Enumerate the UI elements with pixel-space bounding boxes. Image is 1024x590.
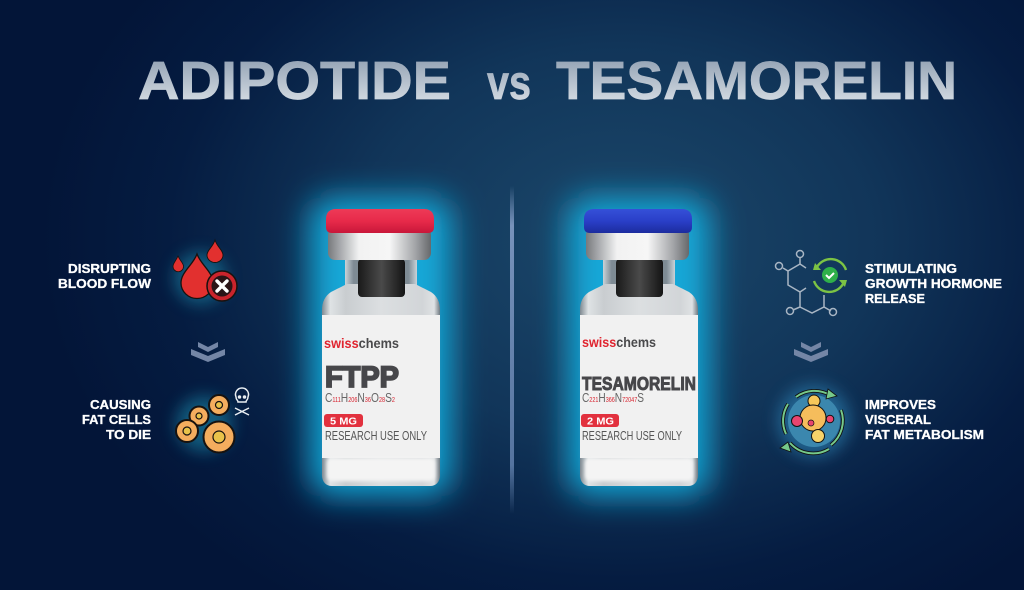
vial neck (345, 258, 417, 290)
label: disrupting blood flow: DISRUPTING (68, 262, 151, 276)
research note: RESEARCH USE ONLY (582, 428, 682, 443)
label: stimulating growth hormone release: GROWTH HORMONE (865, 277, 1002, 291)
label: stimulating growth hormone release: STIMULATING (865, 262, 957, 276)
label: improves visceral fat metabolism: IMPROVES (865, 398, 936, 412)
icon: skull and crossbones (235, 388, 249, 415)
arrow: double chevron down (794, 342, 828, 362)
vial stopper (358, 259, 405, 297)
vial label (580, 315, 698, 458)
powder (585, 458, 693, 481)
icon: molecule with green check cycle (776, 250, 847, 316)
powder (327, 458, 435, 481)
label: improves visceral fat metabolism: VISCERAL (865, 413, 931, 427)
label: disrupting blood flow: BLOOD FLOW (58, 277, 151, 291)
icon: dying fat cells (176, 388, 249, 452)
vial label (322, 315, 440, 458)
vial: Tesamorelin (568, 198, 710, 496)
label: improves visceral fat metabolism: FAT METABOLISM (865, 428, 984, 442)
center divider (510, 186, 514, 514)
label: disrupting blood flow (58, 262, 151, 291)
dose badge (581, 414, 619, 428)
vial glow (568, 198, 710, 496)
vial crimp (328, 228, 431, 260)
vial body (322, 284, 440, 486)
chemical formula: C221H366N72047S (582, 390, 644, 405)
product name: TESAMORELIN (582, 374, 696, 394)
vial body (580, 284, 698, 486)
dose badge: 5 MG (330, 416, 357, 428)
vial: FTPP / Adipotide (310, 198, 452, 496)
icon: blood drops with x (173, 240, 237, 304)
icon: visceral fat metabolism (778, 385, 850, 457)
dose badge: 2 MG (587, 416, 614, 428)
label: stimulating growth hormone release (865, 262, 1002, 306)
label: causing fat cells to die: TO DIE (106, 428, 151, 442)
brand: swisschems (582, 334, 656, 350)
right column: Tesamorelin effects (776, 250, 1002, 457)
brand: swisschems (324, 335, 399, 351)
label: causing fat cells to die: CAUSING (90, 398, 151, 412)
vial cap (584, 209, 692, 233)
dose badge (324, 414, 363, 428)
product name: FTPP (325, 361, 399, 394)
vial crimp (586, 228, 689, 260)
research note: RESEARCH USE ONLY (325, 428, 427, 443)
vial glow (310, 198, 452, 496)
vial cap (326, 209, 434, 233)
label: stimulating growth hormone release: RELEASE (865, 292, 925, 306)
label: improves visceral fat metabolism (865, 398, 984, 442)
left column: Adipotide effects (58, 240, 249, 452)
title (138, 51, 957, 111)
arrow: double chevron down (191, 342, 225, 362)
label: causing fat cells to die: FAT CELLS (82, 413, 151, 427)
chemical formula: C111H206N36O28S2 (325, 390, 395, 405)
vial neck (603, 258, 675, 290)
title: vs: vs (487, 57, 531, 110)
title: Adipotide: ADIPOTIDE (138, 51, 451, 111)
vial stopper (616, 259, 663, 297)
title: Tesamorelin: TESAMORELIN (556, 51, 957, 111)
label: causing fat cells to die (82, 398, 151, 442)
